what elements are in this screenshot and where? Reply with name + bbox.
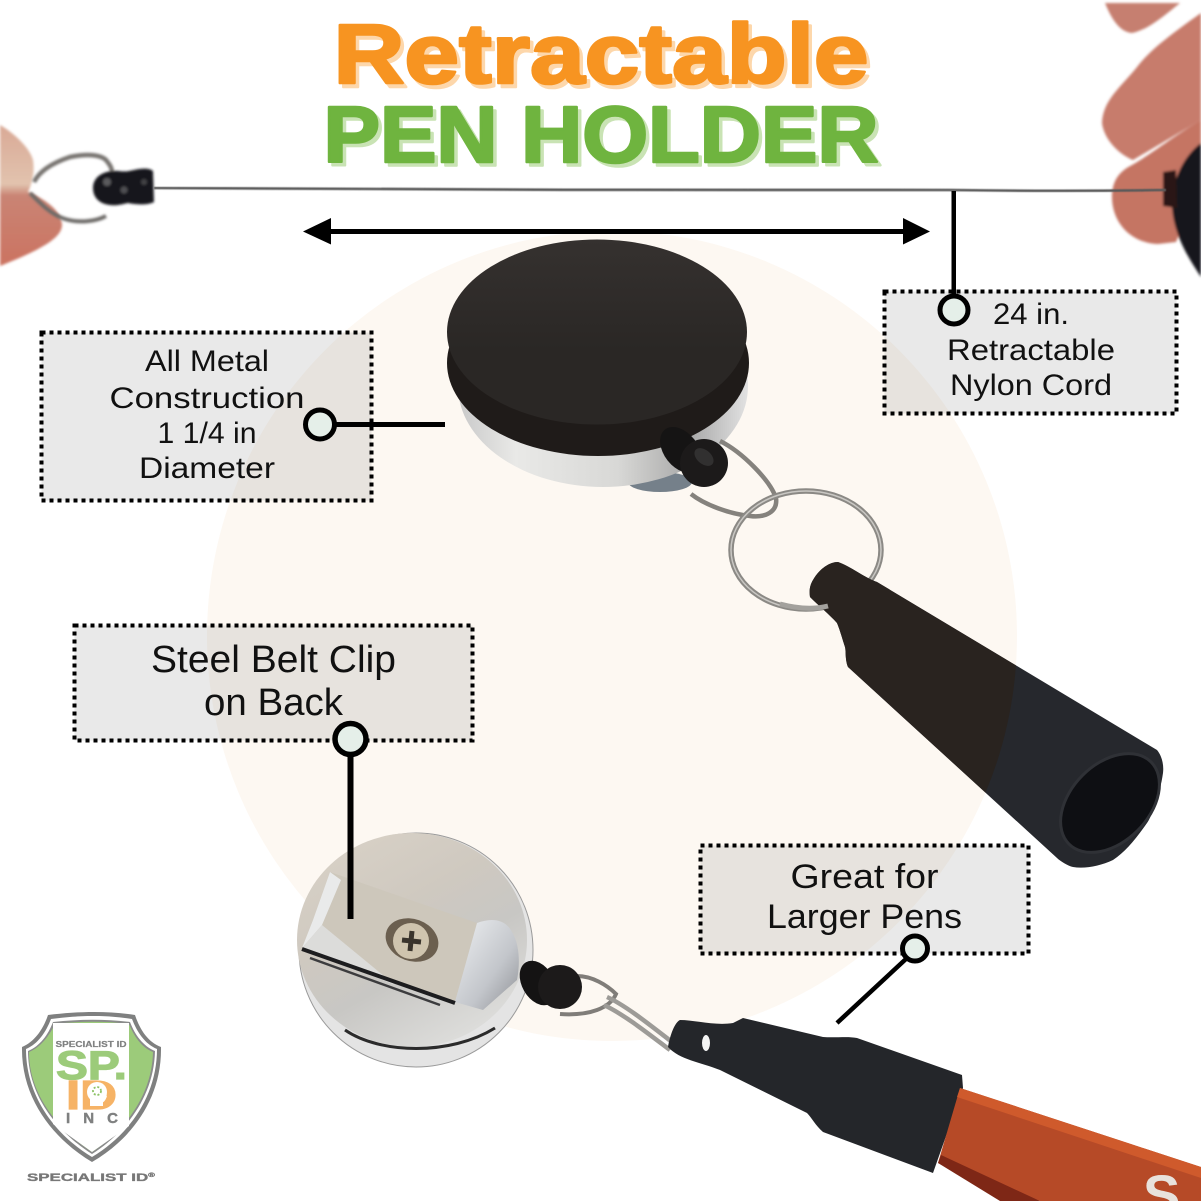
chrome band xyxy=(458,285,748,487)
title line: PEN HOLDER: PEN HOLDER xyxy=(324,90,878,179)
pen upper facet xyxy=(957,1088,1201,1178)
callout: nylon cord: Retractable xyxy=(947,334,1115,367)
white centre stripe xyxy=(53,1023,129,1152)
black top face xyxy=(447,240,747,424)
cord ring and black stopper bead xyxy=(30,155,154,221)
clip bevel highlight xyxy=(302,872,341,948)
clip shadow slot xyxy=(302,949,455,1003)
connector: steel belt clip xyxy=(335,724,366,919)
green shield sides xyxy=(29,1022,153,1152)
logo wordmark: SPECIALIST ID xyxy=(27,1172,106,1184)
split rings to sleeve xyxy=(604,997,672,1050)
logo text: INC: INC xyxy=(66,1110,118,1127)
callout: nylon cord xyxy=(884,292,1176,414)
callout: all metal construction: Diameter xyxy=(139,452,275,485)
chrome rim xyxy=(299,833,533,1067)
swivel bead xyxy=(512,954,582,1012)
clip bent end xyxy=(455,920,519,1010)
logo text: specialist id small: SPECIALIST ID xyxy=(56,1040,127,1049)
pen sleeve xyxy=(668,1018,963,1173)
left hand pinching the clip ring xyxy=(0,125,62,266)
title line: Retractable: Retractable xyxy=(337,11,872,105)
sleeve hole xyxy=(702,1035,710,1051)
sleeve opening rim xyxy=(1041,734,1179,872)
chrome back face xyxy=(297,833,527,1047)
pen lower facet xyxy=(938,1155,1040,1201)
swivel bead xyxy=(652,419,728,487)
callout: all metal construction xyxy=(42,332,372,500)
callout: steel belt clip: on Back xyxy=(204,682,344,724)
title xyxy=(324,7,882,182)
callout: all metal construction: All Metal xyxy=(145,345,269,378)
clip lower reflection xyxy=(302,925,395,985)
ring end in sleeve xyxy=(780,604,828,608)
nylon cord xyxy=(154,188,1166,191)
connector: nylon cord xyxy=(940,191,968,324)
logo: Specialist ID shield xyxy=(22,1012,161,1184)
arrow: cord extension xyxy=(303,218,930,244)
top reel photo xyxy=(447,240,1179,872)
callout: great for larger pens: Great for xyxy=(790,858,938,896)
logo text: SP: SP. xyxy=(56,1044,127,1088)
large split ring xyxy=(731,491,881,609)
shield outline xyxy=(22,1012,161,1162)
callout: steel belt clip: Steel Belt Clip xyxy=(151,639,396,681)
icon: head in ID xyxy=(87,1082,107,1106)
split rings xyxy=(560,976,616,1014)
screw xyxy=(379,911,445,969)
connector: larger pens xyxy=(837,936,928,1023)
callout: great for larger pens xyxy=(700,846,1028,954)
tapered pen sleeve xyxy=(810,562,1163,868)
logo wordmark: ® xyxy=(148,1172,156,1179)
background cream circle xyxy=(207,231,1017,1041)
orange pen barrel xyxy=(938,1088,1201,1201)
callout: all metal construction: 1 1/4 in xyxy=(158,417,256,450)
connector: all metal construction xyxy=(306,410,445,439)
logo text: ID: ID xyxy=(66,1072,117,1118)
callout: nylon cord: Nylon Cord xyxy=(950,369,1112,402)
black side band xyxy=(447,270,749,456)
callout: all metal construction: Construction xyxy=(110,382,304,415)
callout: steel belt clip xyxy=(74,626,472,740)
title line: Retractable: Retractable xyxy=(334,7,868,101)
callout: nylon cord: 24 in. xyxy=(993,298,1069,331)
callout: great for larger pens: Larger Pens xyxy=(767,898,962,936)
steel belt clip xyxy=(302,872,477,1002)
bottom reel photo xyxy=(297,833,1201,1201)
small split ring xyxy=(691,441,776,516)
title line: PEN HOLDER: PEN HOLDER xyxy=(327,94,882,182)
right hand holding the reel xyxy=(1102,3,1201,277)
